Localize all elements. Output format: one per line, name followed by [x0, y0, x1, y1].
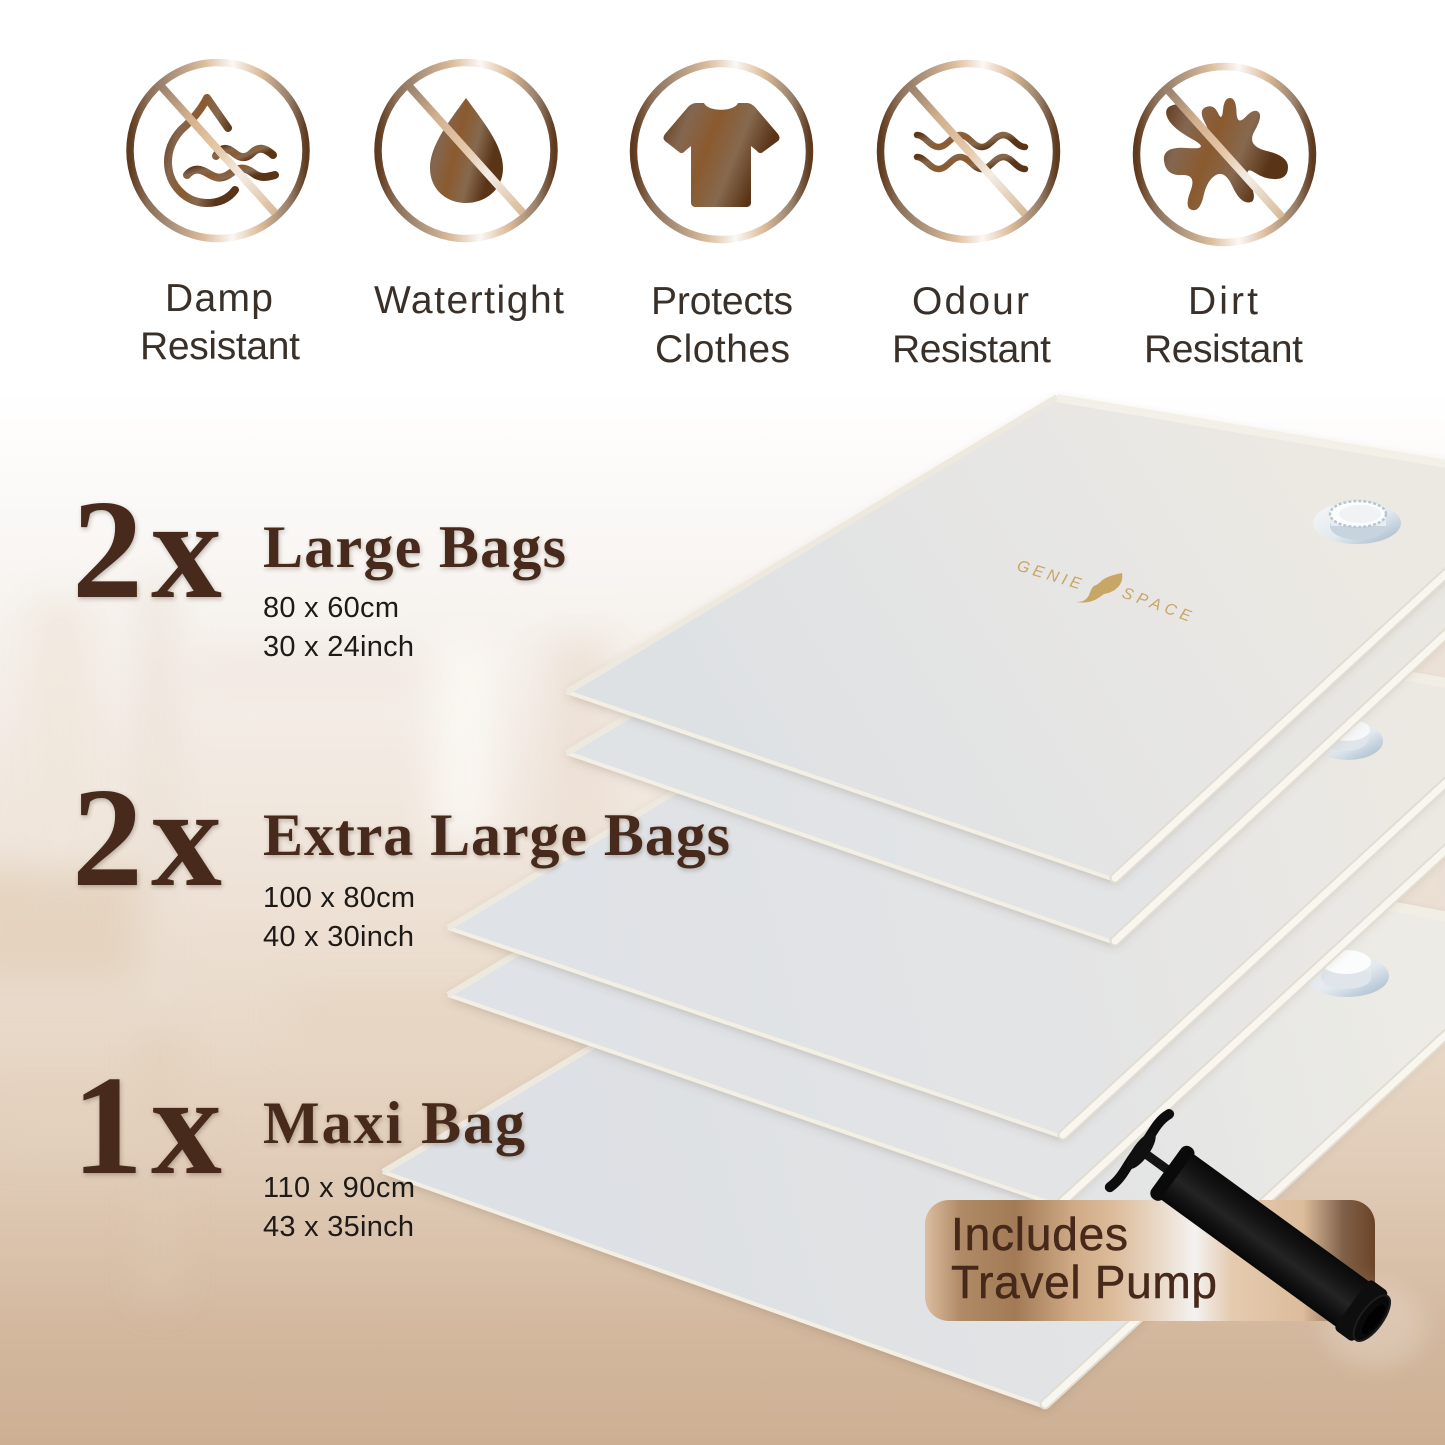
dimensions: 100 x 80cm [263, 882, 415, 914]
icon: dirt resistant [1136, 66, 1312, 242]
dimensions: 30 x 24inch [263, 631, 414, 663]
heading: Large Bags [263, 514, 566, 580]
icon: protects clothes [634, 64, 810, 240]
icon: valve on extra large bag [1313, 719, 1383, 760]
row: maxi bag [72, 1046, 525, 1243]
row: large bags [72, 470, 566, 663]
label: damp resistant: Damp [165, 277, 273, 320]
icon: valve on maxi bag [1305, 950, 1389, 997]
label: damp resistant: Resistant [140, 325, 300, 368]
bag: large lower [567, 459, 1445, 943]
brand logo: GENIE [1015, 558, 1083, 593]
quantity: 1x [72, 1046, 222, 1204]
label: dirt resistant: Dirt [1188, 280, 1258, 323]
icon: watertight [378, 62, 554, 238]
row: extra large bags [72, 758, 730, 953]
icon: odour resistant [880, 64, 1056, 240]
dimensions: 43 x 35inch [263, 1211, 414, 1243]
label: odour resistant: Resistant [892, 328, 1051, 371]
bag: large top [567, 397, 1445, 880]
callout: includes travel pump [925, 1200, 1375, 1321]
label: odour resistant: Odour [912, 280, 1029, 323]
bag: maxi [383, 824, 1445, 1407]
heading: Maxi Bag [263, 1090, 525, 1156]
dimensions: 40 x 30inch [263, 921, 414, 953]
label: watertight: Watertight [374, 279, 564, 322]
dimensions: 80 x 60cm [263, 592, 399, 624]
icon: valve [1313, 501, 1401, 544]
label: protects clothes: Protects [651, 280, 793, 323]
label: protects clothes [651, 280, 793, 371]
quantity: 2x [72, 470, 222, 628]
dimensions: 110 x 90cm [263, 1172, 415, 1204]
label: damp resistant [140, 277, 300, 368]
quantity: 2x [72, 758, 222, 916]
dimensions [263, 882, 415, 953]
icon: damp resistant [130, 62, 306, 238]
label: dirt resistant: Resistant [1144, 328, 1303, 371]
brand logo: SPACE [1120, 585, 1193, 625]
icon row [130, 62, 1312, 242]
heading: Extra Large Bags [263, 802, 730, 868]
feature labels [140, 277, 1303, 371]
brand logo [1015, 558, 1193, 625]
label: odour resistant [892, 280, 1051, 371]
dimensions [263, 592, 414, 663]
label: dirt resistant [1144, 280, 1303, 371]
callout: includes travel pump: Includes [951, 1208, 1128, 1260]
callout: includes travel pump: Travel Pump [951, 1256, 1217, 1308]
icon: travel pump [1107, 1109, 1425, 1367]
bag: extra large upper [448, 604, 1445, 1137]
label: protects clothes: Clothes [655, 328, 790, 371]
bag: extra large lower [448, 670, 1445, 1206]
dimensions [263, 1172, 415, 1243]
